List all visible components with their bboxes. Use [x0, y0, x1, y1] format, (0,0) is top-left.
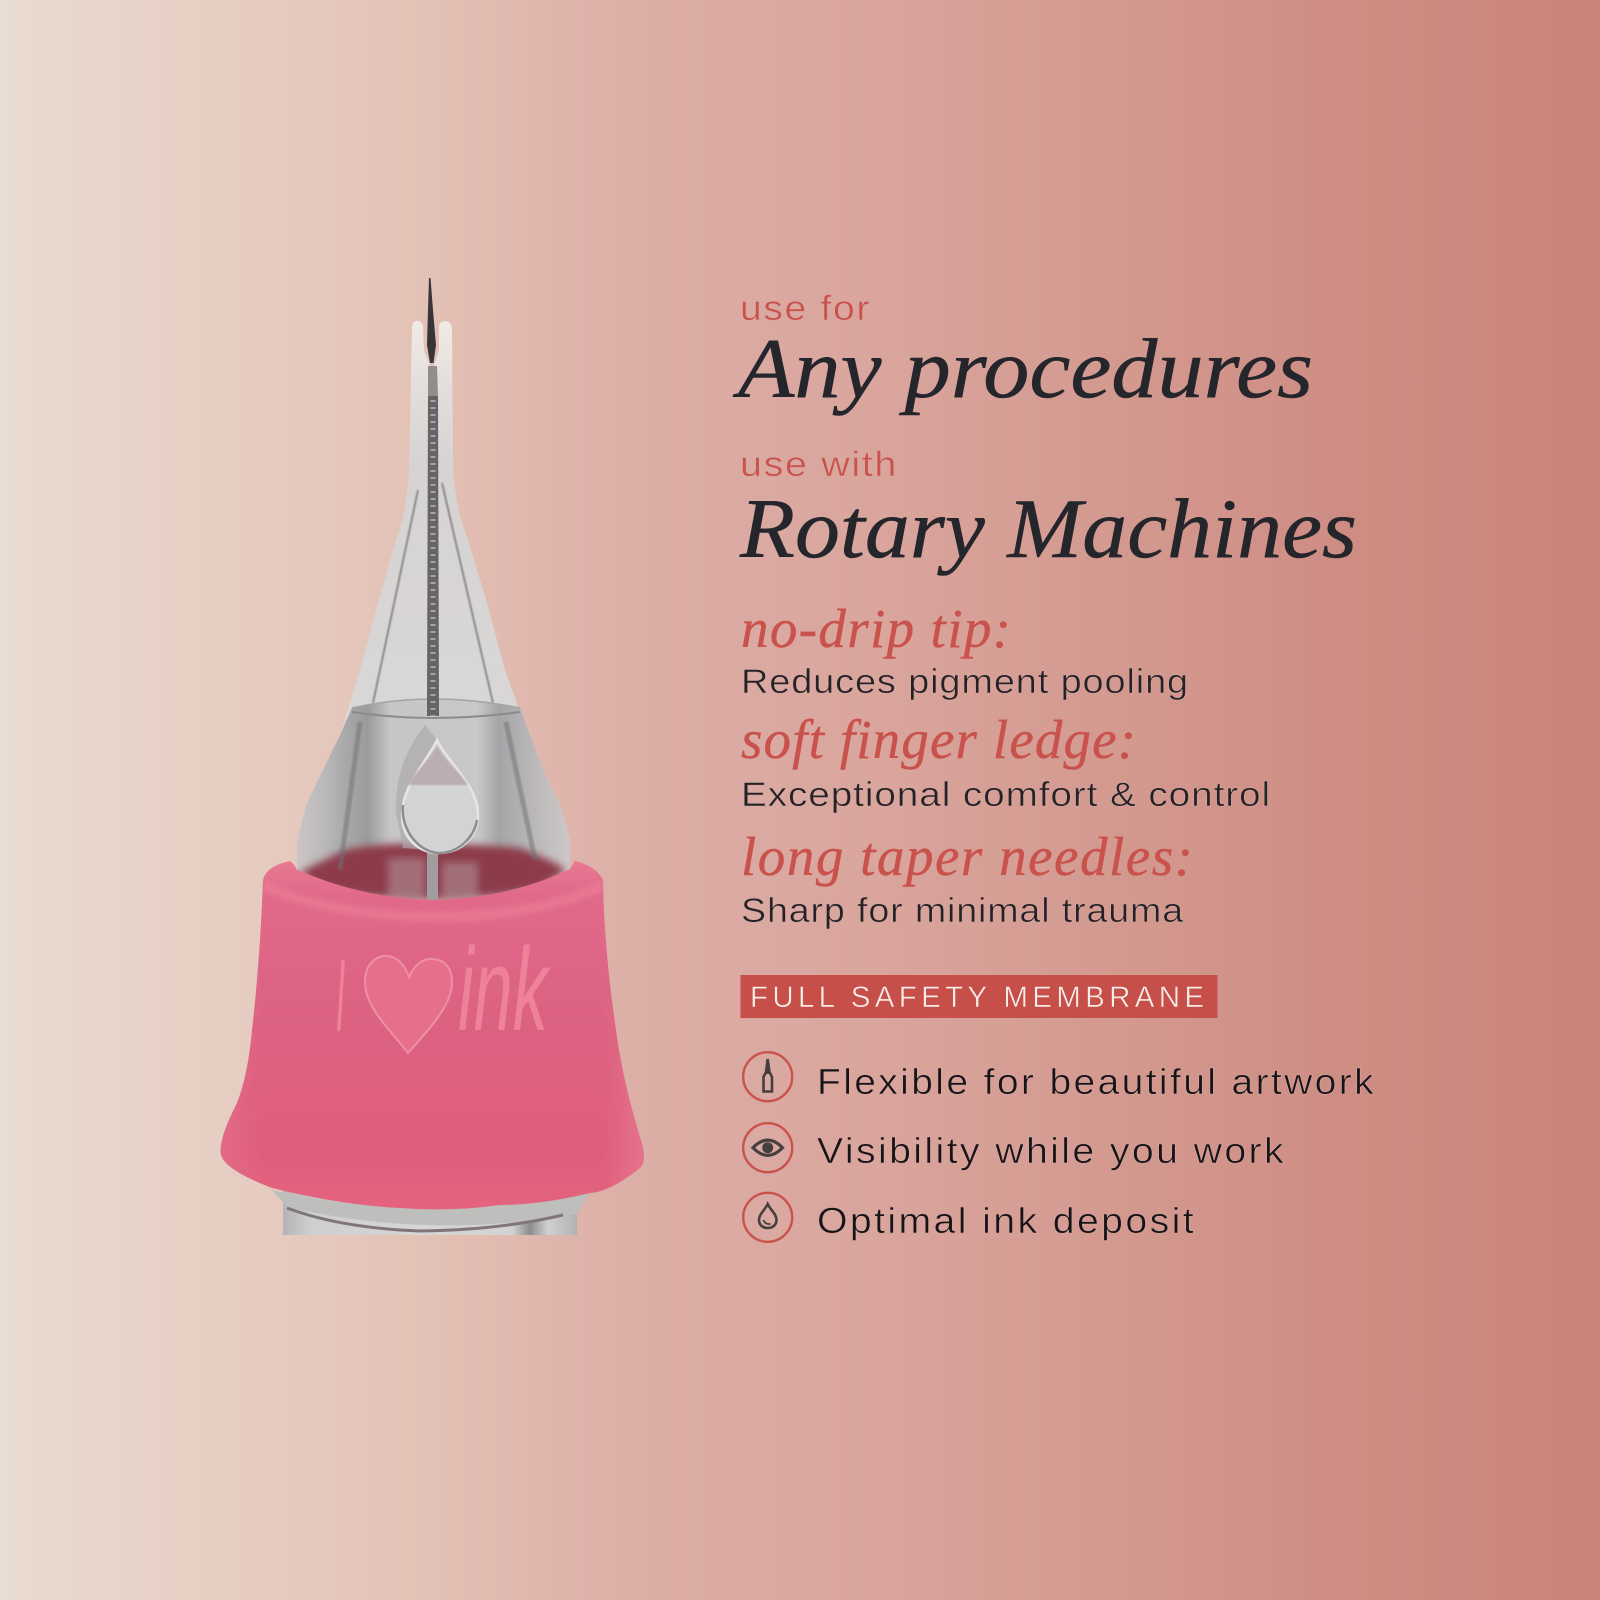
ink highlights: [388, 858, 478, 900]
feature title: no-drip tip:: [741, 598, 1011, 659]
icon: ink drop: [743, 1193, 792, 1242]
tip inner lines: [373, 483, 493, 703]
embossed logo: I love ink: [336, 924, 551, 1056]
icon: eye: [743, 1123, 792, 1172]
lower clear collar: [297, 699, 570, 895]
benefit: visibility: [743, 1123, 1286, 1172]
clear tip body: [297, 321, 570, 900]
clear base below the pink grip: [272, 1185, 590, 1235]
teardrop window: [396, 725, 478, 853]
feature: soft finger ledge: [741, 709, 1271, 814]
grip rim highlight: [264, 880, 603, 922]
benefit text: Optimal ink deposit: [817, 1200, 1196, 1241]
icon: heart: [365, 956, 452, 1053]
feature title: soft finger ledge:: [741, 709, 1136, 770]
heading: Any procedures: Any procedures: [733, 322, 1313, 416]
needle point: [427, 278, 436, 363]
feature description: Exceptional comfort & control: [741, 776, 1271, 814]
pink grip: [221, 861, 644, 1209]
feature: no-drip tip: [741, 598, 1189, 701]
feature: long taper needles: [741, 826, 1193, 930]
label: use with: use with: [740, 445, 898, 484]
needle shaft: [427, 366, 439, 900]
feature description: Sharp for minimal trauma: [741, 892, 1184, 930]
label: use for: use for: [740, 289, 871, 328]
feature description: Reduces pigment pooling: [741, 663, 1189, 701]
heading: Rotary Machines: Rotary Machines: [739, 482, 1357, 576]
benefit text: Visibility while you work: [817, 1130, 1286, 1171]
text block: use with: [739, 445, 1357, 576]
benefit: ink deposit: [743, 1193, 1196, 1242]
benefit: flexible: [743, 1052, 1376, 1102]
icon: needle: [743, 1052, 792, 1101]
text block: use for: [733, 289, 1313, 416]
ink residue: [300, 843, 566, 899]
embossed logo: I love ink: ink: [458, 924, 551, 1056]
banner: full safety membrane: FULL SAFETY MEMBRANE: [750, 981, 1204, 1014]
benefit text: Flexible for beautiful artwork: [817, 1061, 1376, 1102]
product: needle cartridge: [221, 278, 644, 1235]
feature title: long taper needles:: [741, 826, 1193, 887]
embossed logo: I love ink: I: [336, 940, 345, 1052]
